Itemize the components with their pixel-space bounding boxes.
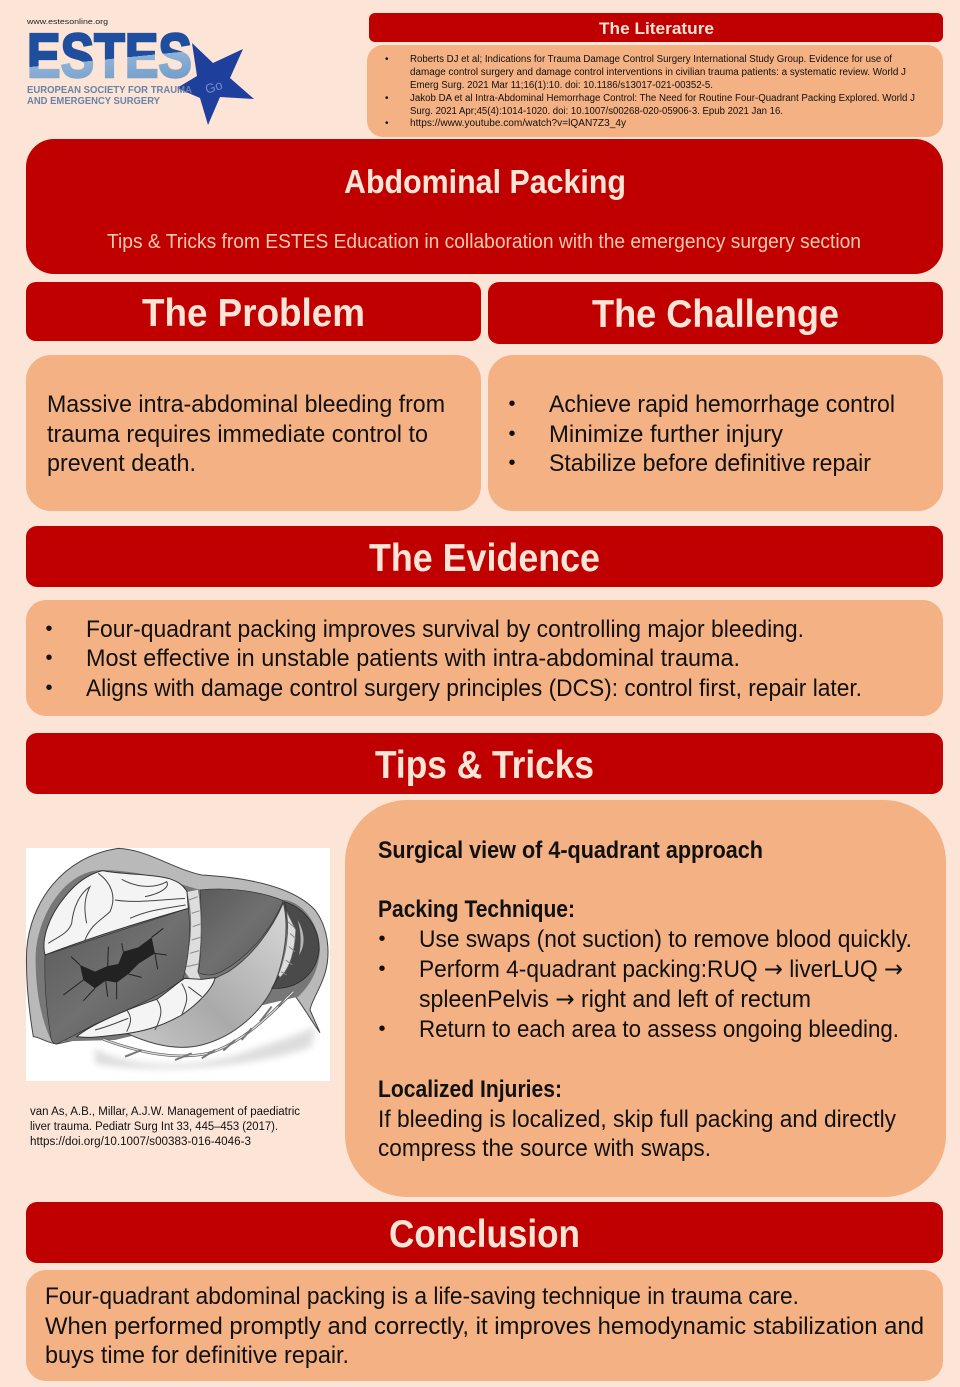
literature references: damage control surgery and damage control interventions in civilian trauma patients: a systematic review. World J	[410, 67, 906, 78]
challenge heading: The Challenge	[592, 293, 839, 336]
liver laceration	[80, 937, 155, 988]
panel: packing technique	[345, 800, 946, 1197]
conclusion heading bar	[26, 1202, 943, 1263]
panel: the literature	[367, 13, 943, 137]
falciform ligament	[183, 889, 203, 987]
gastric ligament	[278, 912, 296, 977]
literature box	[367, 45, 943, 137]
packing technique list: spleenPelvis → right and left of rectum	[419, 985, 811, 1013]
challenge list: Minimize further injury	[549, 421, 783, 448]
logo star	[177, 43, 254, 125]
evidence list: Four-quadrant packing improves survival by controlling major bleeding.	[86, 616, 804, 643]
logo website text: www.estesonline.org	[26, 17, 108, 26]
evidence heading bar	[26, 526, 943, 587]
upper omentum packing	[44, 871, 188, 955]
literature references	[385, 54, 915, 129]
evidence list: •	[46, 647, 53, 669]
literature references: Emerg Surg. 2021 Mar 11;16(1):10. doi: 10.1186/s13017-021-00352-5.	[410, 80, 713, 91]
spleen	[272, 902, 319, 988]
mesentery vessels highlight	[103, 992, 293, 1056]
packing technique heading: Packing Technique:	[378, 896, 575, 923]
logo wordmark: ESTES	[27, 22, 192, 91]
panel: the evidence	[26, 526, 943, 716]
evidence list	[46, 616, 862, 702]
panel: conclusion	[26, 1202, 943, 1381]
vessel branches	[125, 993, 288, 1060]
ligament stripes	[187, 897, 200, 967]
logo society name	[27, 84, 192, 107]
challenge list: •	[508, 452, 516, 474]
problem text: prevent death.	[47, 450, 196, 477]
logo: ESTES	[26, 17, 254, 125]
laceration cracks	[63, 928, 167, 1001]
image citation	[30, 1106, 300, 1148]
challenge list: •	[508, 393, 516, 415]
logo society name: AND EMERGENCY SURGERY	[27, 95, 160, 107]
packing technique list: •	[378, 1018, 386, 1040]
literature references: Surg. 2021 Apr;45(4):1014-1020. doi: 10.1007/s00268-020-05906-3. Epub 2021 Jan 16.	[410, 106, 783, 117]
subtitle: Tips & Tricks from ESTES Education in collaboration with the emergency surgery section	[107, 231, 861, 253]
challenge list	[508, 391, 895, 477]
localized injuries heading: Localized Injuries:	[378, 1076, 562, 1103]
evidence list: Aligns with damage control surgery principles (DCS): control first, repair later.	[86, 675, 862, 702]
literature references: •	[385, 118, 389, 129]
conclusion text: Four-quadrant abdominal packing is a life-saving technique in trauma care.	[45, 1283, 799, 1310]
illustration: surgical view of liver injury	[26, 848, 330, 1081]
evidence heading: The Evidence	[369, 537, 600, 580]
literature references: Roberts DJ et al; Indications for Trauma Damage Control Surgery International Study Group. Evidence for use of	[410, 54, 892, 65]
localized injuries text: If bleeding is localized, skip full packing and directly	[378, 1106, 896, 1133]
packing technique list: Perform 4-quadrant packing:RUQ → liverLUQ →	[419, 955, 903, 983]
lower folds	[95, 983, 202, 1032]
right liver lobe	[45, 908, 189, 1044]
title: Abdominal Packing	[344, 163, 626, 200]
lower omentum packing	[77, 978, 215, 1037]
mesentery vessels	[103, 992, 293, 1056]
image citation: van As, A.B., Millar, A.J.W. Management of paediatric	[30, 1106, 300, 1118]
conclusion heading: Conclusion	[389, 1213, 580, 1256]
literature heading bar	[369, 13, 943, 42]
logo star label: Go	[203, 77, 224, 97]
heading: tips and tricks: Tips & Tricks	[375, 744, 594, 787]
packing technique list: •	[378, 958, 386, 980]
challenge heading bar	[488, 282, 943, 344]
problem box	[26, 355, 481, 511]
conclusion text	[45, 1283, 924, 1369]
gastric ligament stripes	[281, 922, 296, 975]
evidence list: •	[46, 677, 53, 699]
surgical view heading: Surgical view of 4-quadrant approach	[378, 837, 763, 864]
conclusion box	[26, 1270, 943, 1381]
literature references: •	[385, 54, 389, 65]
evidence list: Most effective in unstable patients with intra-abdominal trauma.	[86, 645, 740, 672]
challenge list: •	[508, 423, 516, 445]
panel: the challenge	[488, 282, 943, 511]
problem text: trauma requires immediate control to	[47, 421, 428, 448]
bowel shadow	[95, 1027, 315, 1069]
heading: tips and tricks	[26, 733, 943, 794]
packing technique list: Return to each area to assess ongoing bleeding.	[419, 1016, 899, 1043]
challenge list: Stabilize before definitive repair	[549, 450, 871, 477]
panel: title banner	[26, 139, 943, 274]
conclusion text: buys time for definitive repair.	[45, 1342, 349, 1369]
literature references: •	[385, 93, 389, 104]
conclusion text: When performed promptly and correctly, it improves hemodynamic stabilization and	[45, 1313, 924, 1340]
literature references: https://www.youtube.com/watch?v=lQAN7Z3_4y	[410, 118, 626, 129]
stomach	[127, 903, 286, 1047]
inner wall shadow	[36, 870, 320, 1042]
omentum folds	[48, 873, 186, 943]
evidence box	[26, 600, 943, 716]
problem text	[47, 391, 445, 477]
spleen highlight	[298, 920, 304, 955]
packing technique list: Use swaps (not suction) to remove blood quickly.	[419, 926, 912, 953]
problem heading: The Problem	[142, 292, 365, 335]
problem heading bar	[26, 282, 481, 341]
left liver lobe	[198, 889, 283, 975]
abdominal wall	[26, 848, 328, 1044]
image citation: liver trauma. Pediatr Surg Int 33, 445–453 (2017).	[30, 1121, 278, 1133]
image citation: https://doi.org/10.1007/s00383-016-4046-3	[30, 1136, 251, 1148]
localized injuries text: compress the source with swaps.	[378, 1135, 711, 1162]
literature heading: The Literature	[599, 19, 714, 38]
challenge list: Achieve rapid hemorrhage control	[549, 391, 895, 418]
localized injuries text	[378, 1106, 896, 1162]
problem text: Massive intra-abdominal bleeding from	[47, 391, 445, 418]
evidence list: •	[46, 618, 53, 640]
packing technique list	[378, 926, 912, 1043]
logo society name: EUROPEAN SOCIETY FOR TRAUMA	[27, 84, 192, 96]
packing technique list: •	[378, 928, 386, 950]
challenge box	[488, 355, 943, 511]
literature references: Jakob DA et al Intra-Abdominal Hemorrhage Control: The Need for Routine Four-Quadrant Packing Explored. World J	[410, 93, 915, 104]
panel: the problem	[26, 282, 481, 511]
